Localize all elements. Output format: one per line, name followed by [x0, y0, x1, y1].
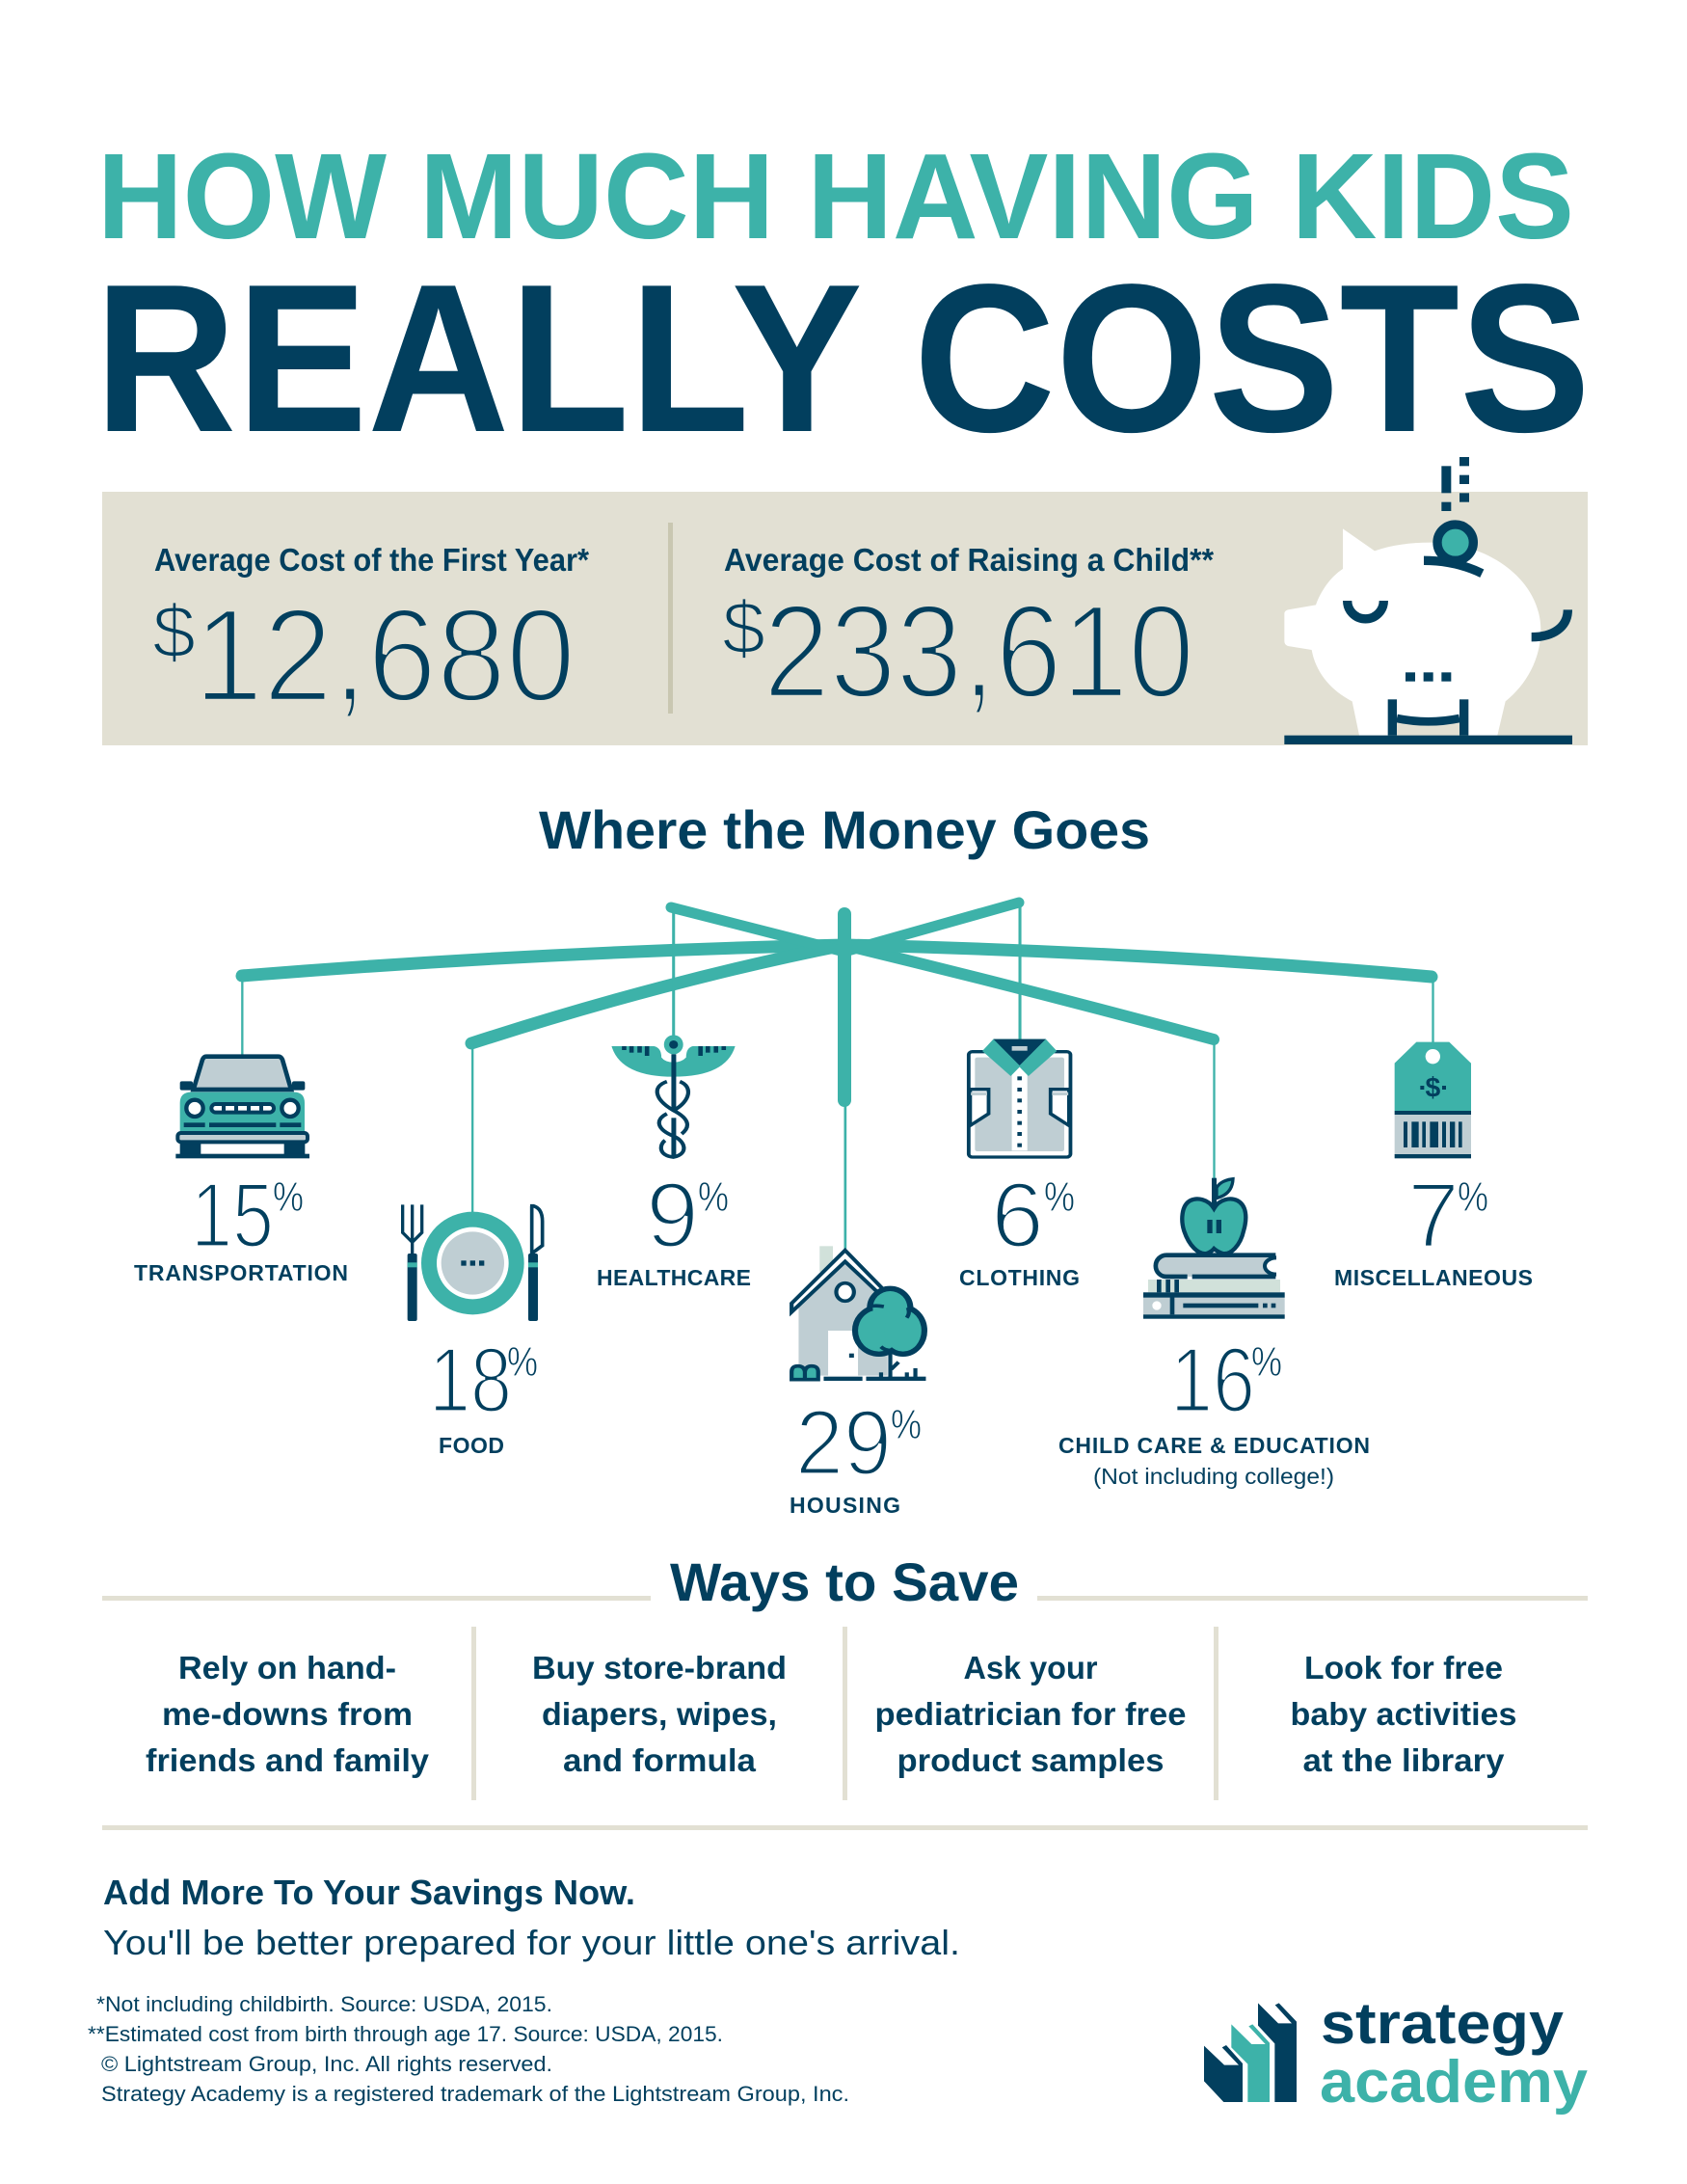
tip 3 — [875, 1650, 1186, 1778]
footnotes — [88, 1992, 849, 2106]
raising a child cost: 233,610 — [763, 578, 1194, 726]
category: miscellaneous — [1334, 977, 1533, 1290]
logo: strategy academy — [1204, 1991, 1589, 2116]
stat: 6% — [959, 1164, 1080, 1290]
icon: price tag — [1395, 977, 1471, 1158]
footnotes: *Not including childbirth. Source: USDA, 2015. — [96, 1992, 552, 2016]
stat: 29% — [790, 1391, 922, 1518]
icon: apple on books — [1143, 1044, 1296, 1319]
stat: 6%: CLOTHING — [959, 1265, 1080, 1290]
first year cost: Average Cost of the First Year* — [154, 542, 589, 578]
stat: 15%: TRANSPORTATION — [134, 1260, 348, 1285]
tip 4: baby activities — [1290, 1696, 1517, 1732]
heading: ways to save: Ways to Save — [670, 1551, 1019, 1612]
category: housing — [790, 1106, 925, 1518]
tip 2: and formula — [563, 1742, 757, 1778]
stat: 16%: % — [1251, 1339, 1282, 1386]
stat: 29%: 29 — [795, 1391, 892, 1495]
category: healthcare — [597, 907, 751, 1290]
tip 3: pediatrician for free — [875, 1696, 1186, 1732]
stat: 7% — [1334, 1164, 1533, 1290]
tip 1: friends and family — [146, 1742, 430, 1778]
tip 4 — [1290, 1650, 1517, 1778]
logo: strategy academy: strategy — [1321, 1991, 1565, 2056]
stat: 29%: HOUSING — [790, 1493, 900, 1518]
title: REALLY COSTS — [94, 241, 1591, 476]
raising a child cost: Average Cost of Raising a Child** — [724, 542, 1214, 578]
call to action: You'll be better prepared for your little one's arrival. — [103, 1923, 960, 1962]
footnotes: **Estimated cost from birth through age 17. Source: USDA, 2015. — [88, 2022, 723, 2046]
category: food — [403, 1044, 543, 1458]
icon: caduceus — [611, 907, 736, 1157]
category: child care and education — [1058, 1044, 1370, 1489]
icon: house and tree — [791, 1106, 925, 1381]
icon: car — [175, 976, 309, 1158]
heading: where the money goes: Where the Money Goes — [539, 799, 1150, 860]
category: transportation — [134, 976, 348, 1285]
raising a child cost: $ — [722, 585, 765, 670]
stat: 7%: MISCELLANEOUS — [1334, 1265, 1533, 1290]
panel: average costs — [102, 492, 1588, 745]
icon: books — [1204, 2003, 1297, 2102]
stat: 9%: 9 — [646, 1164, 699, 1267]
first year cost: $ — [152, 589, 196, 674]
stat: 15%: % — [273, 1174, 304, 1221]
stat: 6%: 6 — [991, 1164, 1044, 1267]
tip 2 — [532, 1650, 787, 1778]
tip 4: at the library — [1303, 1742, 1505, 1778]
tip 2: Buy store-brand — [532, 1650, 787, 1685]
tip 1 — [146, 1650, 430, 1778]
stat: 15%: 15 — [191, 1164, 274, 1267]
footnotes: Strategy Academy is a registered trademark of the Lightstream Group, Inc. — [101, 2082, 849, 2106]
stat: 9% — [597, 1164, 751, 1290]
tip 2: diapers, wipes, — [542, 1696, 777, 1732]
stat: 7%: 7 — [1407, 1164, 1459, 1267]
stat: 16% — [1058, 1329, 1370, 1489]
tip 1: Rely on hand- — [178, 1650, 396, 1685]
tip 3: Ask your — [964, 1650, 1098, 1685]
first year cost: 12,680 — [194, 581, 576, 730]
mobile arms — [242, 903, 1432, 1100]
title — [94, 128, 1591, 476]
tip 1: me-downs from — [162, 1696, 413, 1732]
stat: 29%: % — [891, 1402, 922, 1448]
icon: price tag: $ — [1425, 1072, 1440, 1103]
call to action — [103, 1873, 960, 1962]
stat: 9%: HEALTHCARE — [597, 1265, 751, 1290]
stat: 18%: FOOD — [439, 1433, 504, 1458]
category: clothing — [959, 903, 1080, 1290]
stat: 6%: % — [1044, 1174, 1075, 1221]
stat: 18%: 18 — [429, 1329, 512, 1432]
footnotes: © Lightstream Group, Inc. All rights reserved. — [101, 2052, 552, 2076]
stat: 16%: CHILD CARE & EDUCATION — [1058, 1433, 1370, 1458]
call to action: Add More To Your Savings Now. — [103, 1873, 635, 1912]
stat: 18%: % — [507, 1339, 538, 1386]
icon: shirt — [969, 903, 1070, 1157]
stat: 16%: 16 — [1170, 1329, 1255, 1432]
section: ways to save — [102, 1551, 1588, 1830]
icon: plate and cutlery — [403, 1044, 543, 1321]
icon: piggy bank — [1284, 457, 1572, 744]
tip 3: product samples — [897, 1742, 1165, 1778]
tip 4: Look for free — [1304, 1650, 1503, 1685]
stat: 7%: % — [1458, 1174, 1488, 1221]
stat: 9%: % — [698, 1174, 729, 1221]
stat: 15% — [134, 1164, 348, 1285]
stat: 16%: (Not including college!) — [1093, 1464, 1334, 1489]
title: HOW MUCH HAVING KIDS — [97, 128, 1574, 264]
logo: strategy academy: academy — [1320, 2049, 1589, 2116]
